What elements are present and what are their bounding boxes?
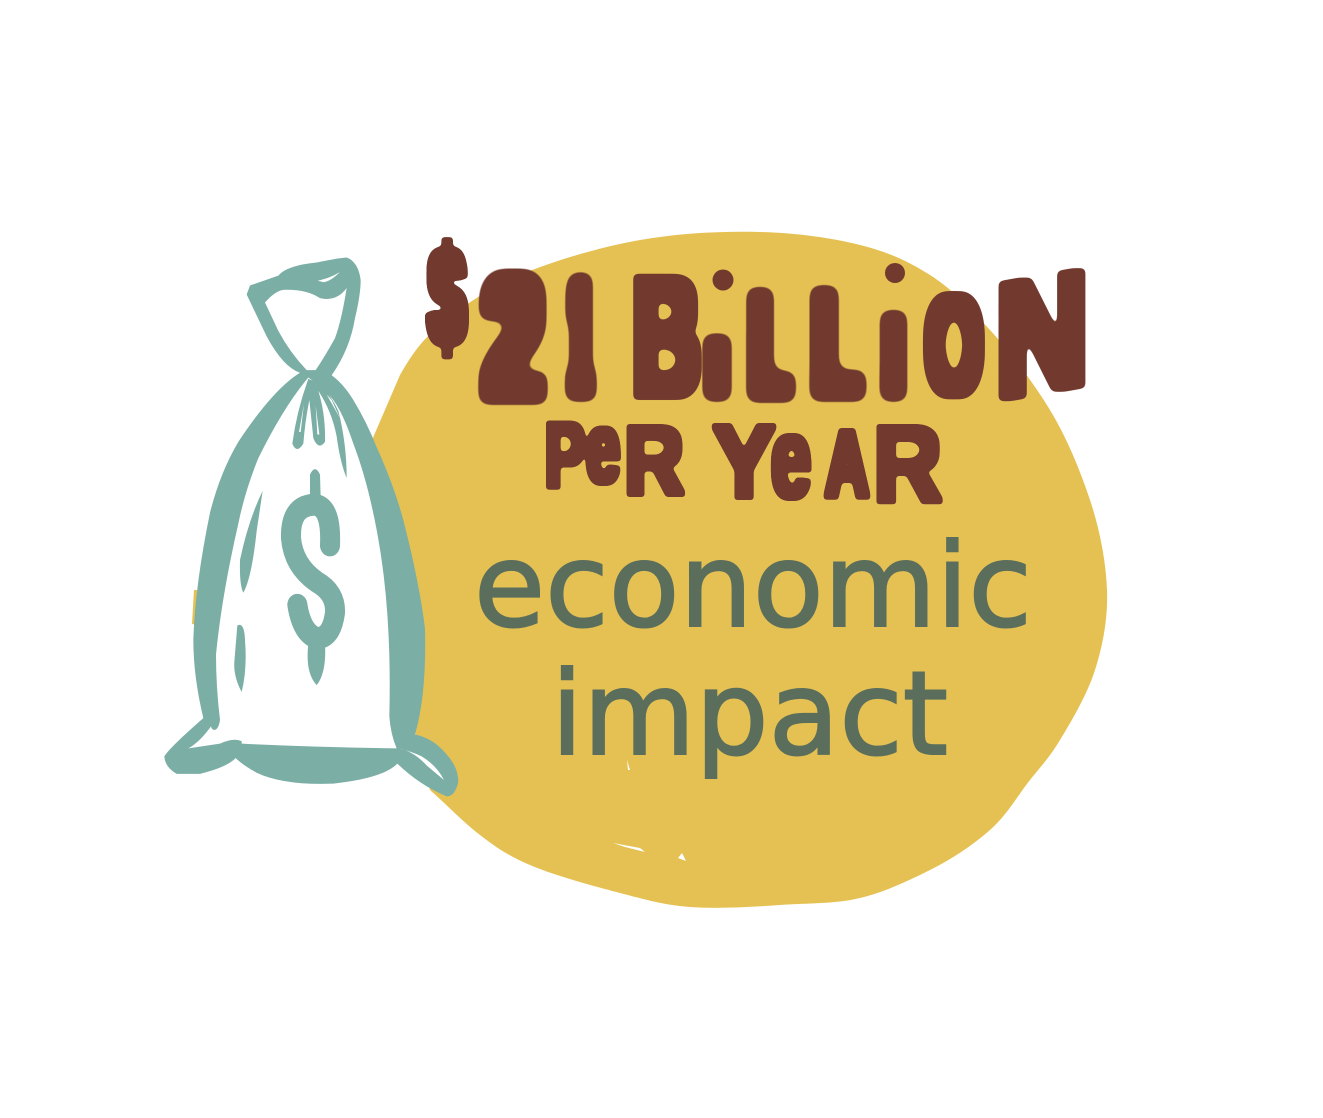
label: economic impact: impact <box>551 647 948 782</box>
subheading: per year: e <box>771 395 811 521</box>
label: economic impact: economic <box>474 519 1032 654</box>
subheading: per year: Y <box>713 404 775 519</box>
subheading: per year: e <box>586 392 620 503</box>
icon: money bag <box>164 257 458 796</box>
headline: $21 billion: L <box>752 269 787 422</box>
headline: $21 billion: I <box>706 330 728 406</box>
headline: $21 billion: L <box>814 267 858 421</box>
headline: $21 billion: O <box>926 269 982 421</box>
subheading: per year: A <box>825 411 869 518</box>
label: economic impact <box>474 519 1032 782</box>
subheading: per year <box>545 392 942 524</box>
subheading: per year: R <box>624 406 684 515</box>
headline: $21 billion: N <box>996 239 1088 430</box>
headline: $21 billion <box>428 218 1088 430</box>
headline: $21 billion: 1 <box>574 250 587 425</box>
yellow background blob <box>192 232 1107 908</box>
subheading: per year: P <box>545 405 585 507</box>
headline: $21 billion: 2 <box>484 246 542 429</box>
headline: $21 billion: I <box>885 299 902 413</box>
headline: $21 billion: $ <box>428 218 466 375</box>
headline: $21 billion: B <box>633 245 700 430</box>
subheading: per year: R <box>873 403 942 524</box>
